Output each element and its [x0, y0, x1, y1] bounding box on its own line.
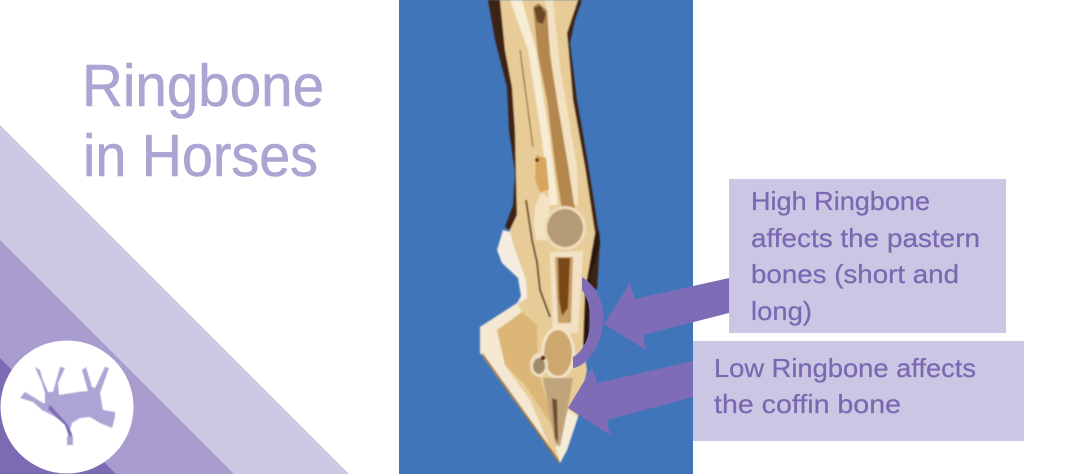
crescent marker over the pastern	[573, 277, 603, 368]
sesamoid	[534, 193, 550, 240]
diagonal background bands	[0, 125, 349, 474]
front hoof wall	[556, 410, 578, 463]
cannon bone end	[544, 206, 586, 250]
title: in Horses	[83, 123, 318, 189]
leg tissue	[480, 0, 595, 463]
callout: low ringbone: Low Ringbone affects	[714, 353, 976, 383]
white frog and sole	[480, 303, 552, 452]
callout: high ringbone: High Ringbone	[751, 186, 930, 216]
navicular bone	[530, 353, 548, 377]
callout: high ringbone: bones (short and	[751, 259, 959, 289]
tendon dark line	[526, 200, 550, 317]
pale fetlock hair	[497, 230, 527, 305]
callout: high ringbone: long)	[751, 296, 812, 326]
callout: high ringbone	[729, 179, 1006, 333]
coffin bone	[543, 378, 573, 447]
pale strip left of marrow	[510, 0, 558, 205]
long pastern bone	[550, 251, 583, 333]
pale strip right of marrow	[545, 0, 578, 205]
hoof sole outline	[482, 354, 560, 463]
photo: blue background	[399, 0, 693, 474]
tendon line	[520, 50, 533, 147]
callout: high ringbone: affects the pastern	[751, 223, 980, 253]
dark coat silhouette	[488, 0, 600, 290]
cannon bone marrow	[533, 3, 575, 210]
spongy patch above fetlock	[535, 155, 549, 192]
title	[82, 53, 324, 189]
title: Ringbone	[82, 53, 324, 119]
short pastern bone	[541, 327, 575, 379]
arrow: low ringbone	[568, 361, 693, 435]
icon: horse on its back in circle	[0, 340, 134, 474]
callout: low ringbone: the coffin bone	[714, 389, 901, 419]
arrow: high ringbone	[604, 278, 729, 350]
digital cushion	[497, 312, 555, 430]
callout: low ringbone	[693, 341, 1024, 441]
photo: sectioned horse leg	[480, 0, 600, 463]
